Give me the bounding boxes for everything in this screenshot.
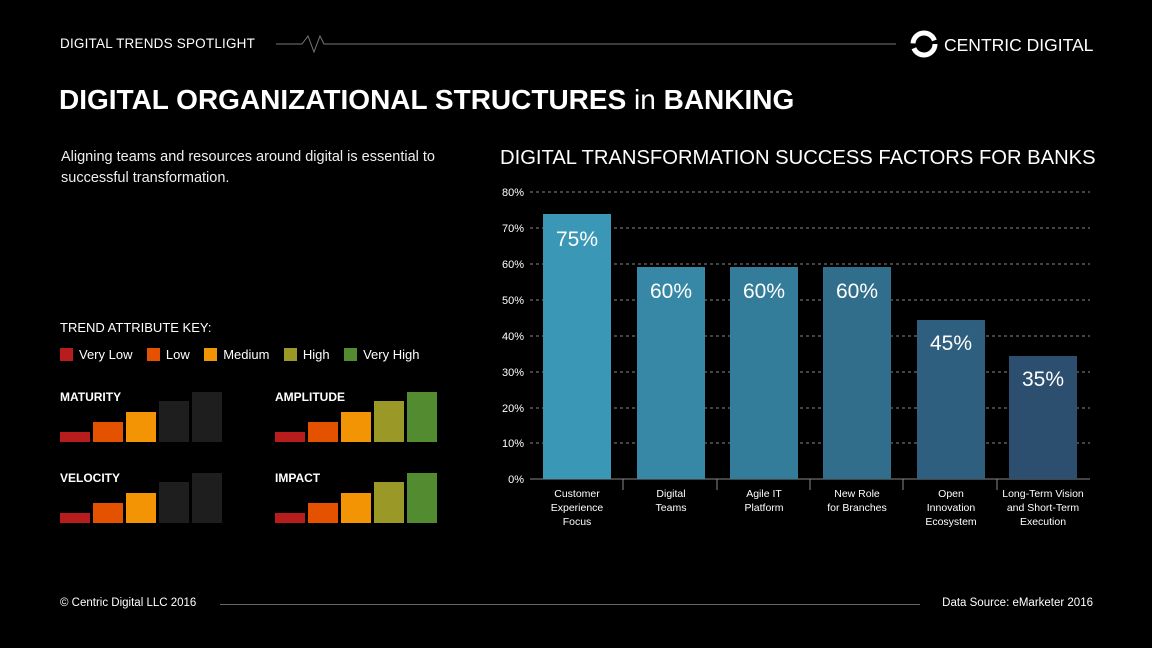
- trend key: [60, 320, 419, 362]
- intro text: Aligning teams and resources around digital is essential to successful transformation.: [61, 149, 435, 186]
- bar chart: Agile IT: [746, 488, 782, 500]
- maturity: MATURITY: [60, 390, 121, 404]
- bar chart: Customer: [554, 488, 600, 500]
- bar chart: Open: [938, 488, 964, 500]
- footer: © Centric Digital LLC 2016: [60, 597, 196, 609]
- chart title: DIGITAL TRANSFORMATION SUCCESS FACTORS FOR BANKS: [500, 147, 1096, 169]
- trend key: TREND ATTRIBUTE KEY:: [60, 320, 211, 335]
- footer: Data Source: eMarketer 2016: [942, 597, 1093, 609]
- bar chart: 60%: [836, 280, 878, 303]
- title: DIGITAL ORGANIZATIONAL STRUCTURES in BANKING: [59, 84, 794, 115]
- bars: [543, 214, 1077, 479]
- bar chart: Platform: [744, 502, 784, 514]
- amplitude: AMPLITUDE: [275, 390, 345, 404]
- bar chart: 60%: [650, 280, 692, 303]
- bar chart: [502, 187, 1090, 528]
- bar chart: for Branches: [827, 502, 887, 514]
- velocity: VELOCITY: [60, 471, 120, 485]
- bar chart: Innovation: [927, 502, 975, 514]
- header line with pulse: [276, 34, 896, 54]
- logo: [910, 30, 1093, 58]
- bar chart: Experience: [551, 502, 603, 514]
- bar chart: and Short-Term: [1007, 502, 1079, 514]
- bar chart: 45%: [930, 332, 972, 355]
- bar chart: 30%: [502, 367, 524, 379]
- bar chart: 60%: [743, 280, 785, 303]
- trend key: Very Low Low Medium High Very High: [79, 347, 419, 362]
- maturity: [60, 390, 222, 442]
- bar chart: Teams: [656, 502, 686, 514]
- bar chart: 0%: [508, 474, 524, 486]
- bar chart: 40%: [502, 331, 524, 343]
- bar chart: Digital: [656, 488, 686, 500]
- bar chart: 75%: [556, 228, 598, 251]
- velocity: [60, 471, 222, 523]
- impact: [275, 471, 437, 523]
- bar chart: 20%: [502, 403, 524, 415]
- bar chart: Ecosystem: [925, 516, 977, 528]
- footer: [60, 597, 1093, 609]
- bar chart: Long-Term Vision: [1002, 488, 1084, 500]
- logo: CENTRIC DIGITAL: [944, 35, 1093, 55]
- header label: DIGITAL TRENDS SPOTLIGHT: [60, 36, 255, 51]
- bar chart: 70%: [502, 223, 524, 235]
- bar chart: Focus: [563, 516, 591, 528]
- impact: IMPACT: [275, 471, 320, 485]
- bar chart: 10%: [502, 438, 524, 450]
- bar chart: Execution: [1020, 516, 1066, 528]
- bar chart: 80%: [502, 187, 524, 199]
- bar chart: 60%: [502, 259, 524, 271]
- bar chart: 50%: [502, 295, 524, 307]
- bar chart: 35%: [1022, 368, 1064, 391]
- bar chart: New Role: [834, 488, 880, 500]
- amplitude: [275, 390, 437, 442]
